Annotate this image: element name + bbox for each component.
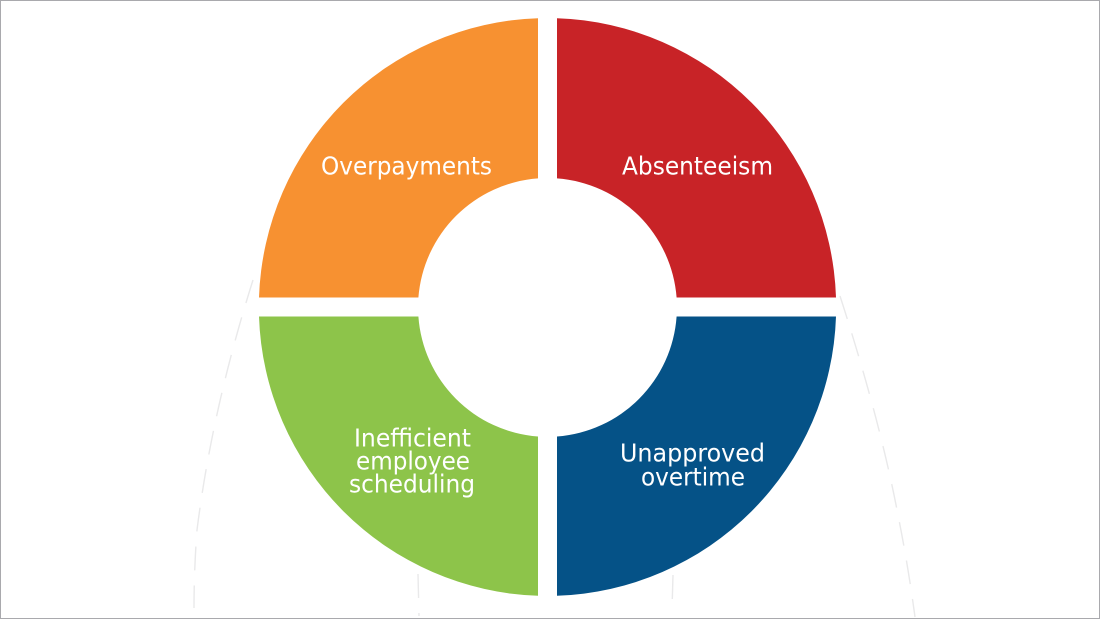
segment: Absenteeism: Absenteeism [622, 152, 773, 180]
segment: Inefficient employee scheduling: Inefficient [354, 424, 471, 452]
segment: Unapproved overtime: Unapproved [620, 438, 765, 468]
segment: Unapproved overtime: overtime [641, 462, 745, 492]
segment: Overpayments [259, 18, 538, 297]
segment: Unapproved overtime [557, 316, 836, 596]
segment: Absenteeism [557, 18, 836, 297]
segment: Overpayments: Overpayments [321, 152, 492, 180]
segment: Inefficient employee scheduling: employee [356, 446, 470, 476]
segment: Inefficient employee scheduling: scheduling [349, 470, 475, 498]
donut chart [259, 18, 836, 596]
segment: Inefficient employee scheduling [259, 316, 538, 596]
